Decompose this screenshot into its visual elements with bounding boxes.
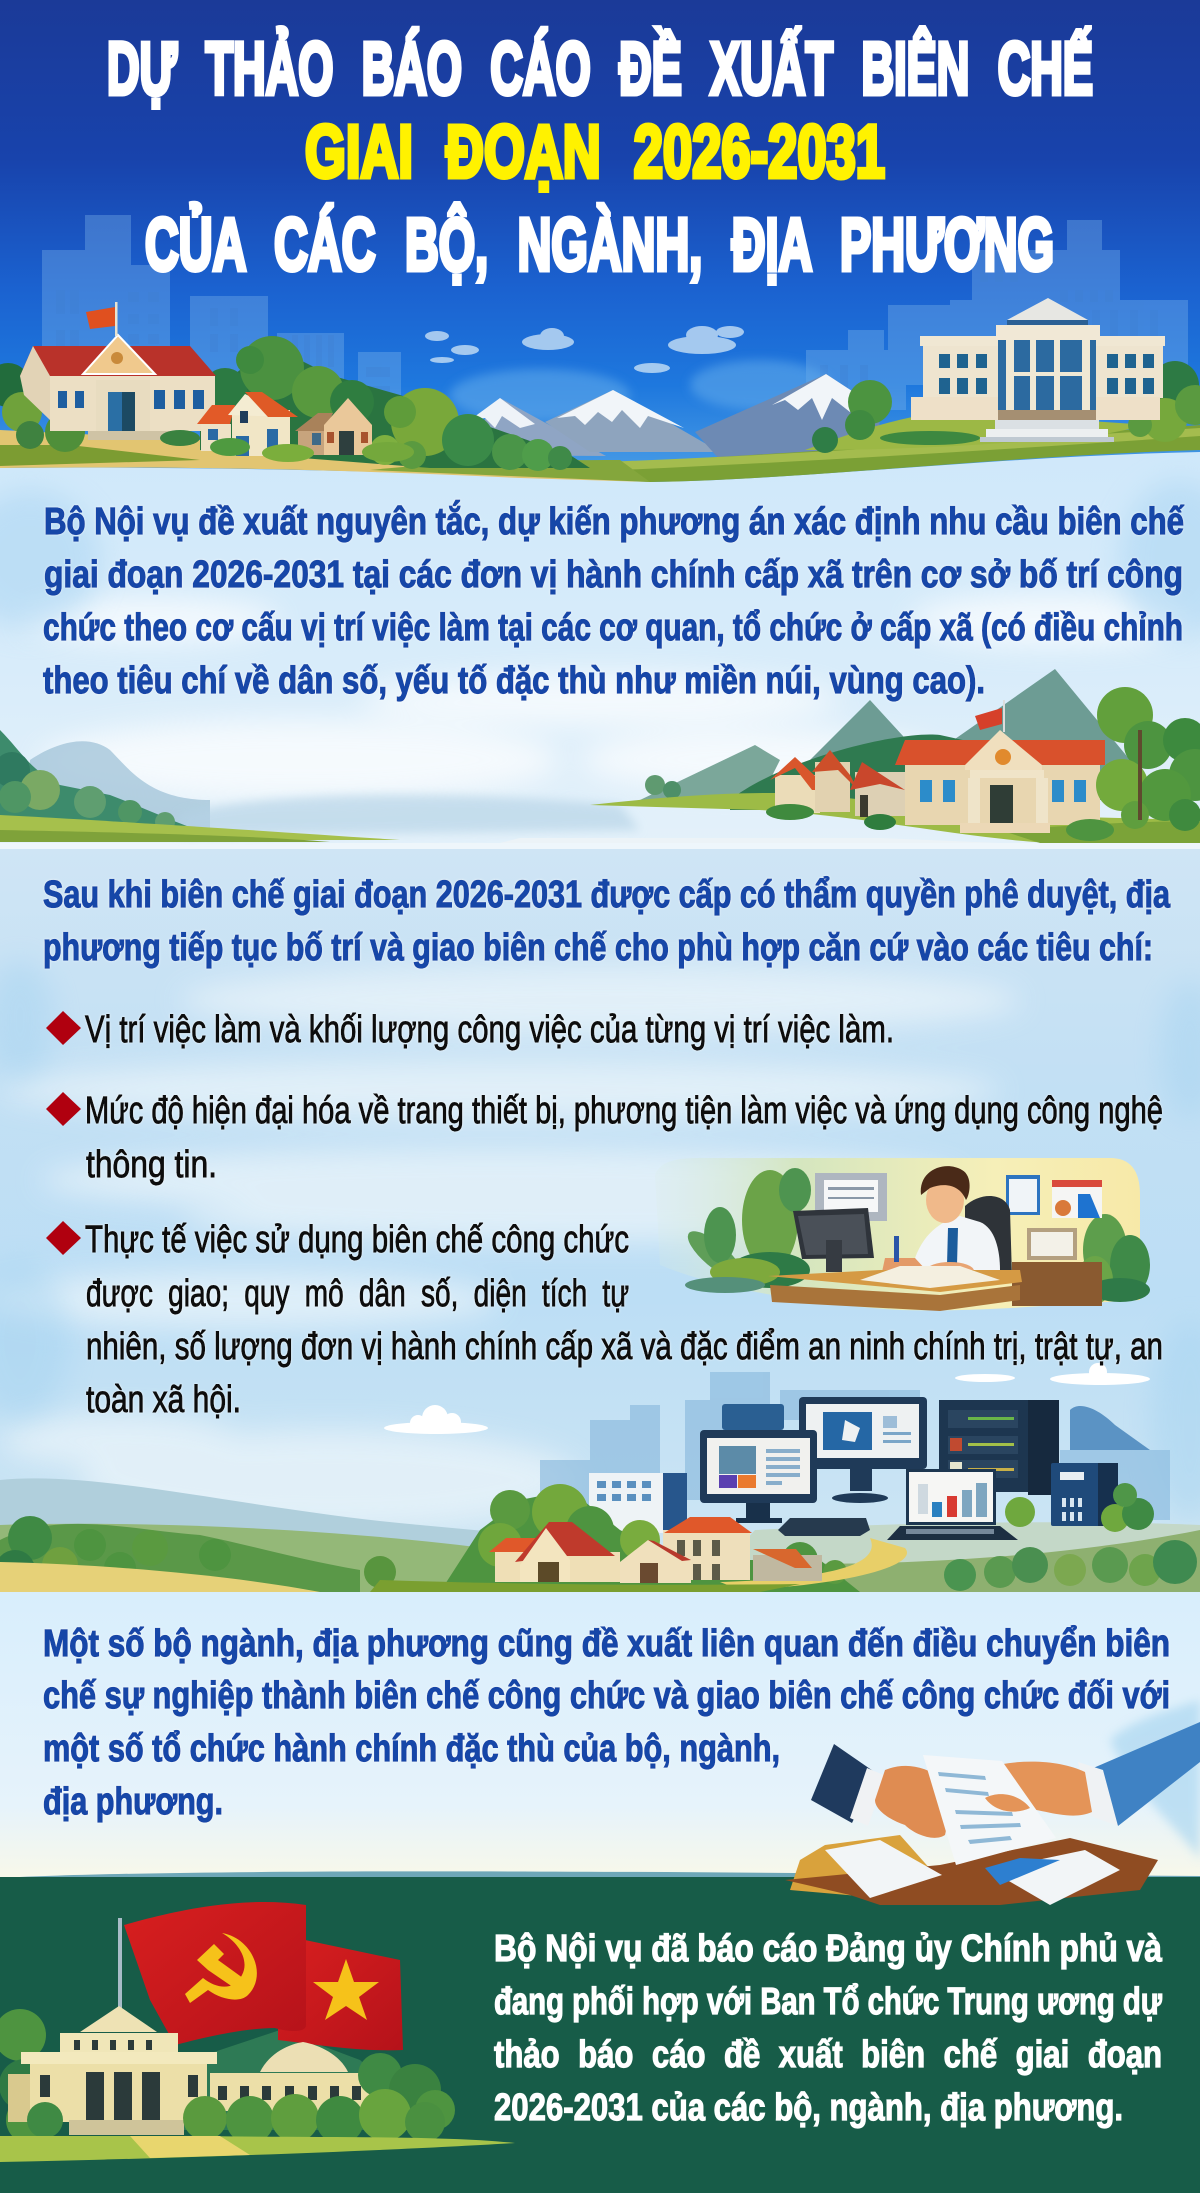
text block: section 1 paragraph: theo tiêu chí về dân số, yếu tố đặc thù như miền núi, vùng cao). <box>43 660 985 702</box>
icon: red flag with star <box>278 1940 403 2050</box>
icon: flag <box>975 700 1005 732</box>
illustration: platform <box>700 1522 1200 1590</box>
illustration: school and houses <box>766 700 1105 833</box>
illustration: white building <box>589 1473 687 1533</box>
panel: section 1 background <box>0 440 1200 850</box>
illustration: left trees <box>0 2009 54 2144</box>
illustration: folders and papers <box>785 1835 1158 1905</box>
illustration: server tower <box>939 1400 1059 1495</box>
illustration: handed paper <box>923 1755 1056 1865</box>
text block: section 3 paragraph: địa phương. <box>43 1781 223 1823</box>
illustration: government building <box>911 298 1165 442</box>
illustration: field <box>0 411 1200 482</box>
illustration: desk <box>768 1266 1022 1311</box>
icon: flagpole <box>118 1918 122 2008</box>
list item: criterion 2 <box>46 1090 1163 1186</box>
illustration: cabinet <box>1012 1262 1102 1306</box>
list item: criterion 3: Thực tế việc sử dụng biên chế công chức <box>85 1219 629 1261</box>
illustration: officer at desk <box>655 1158 1150 1311</box>
text block: section 1 paragraph <box>43 499 1185 702</box>
icon: red diamond <box>46 1092 81 1126</box>
illustration: sleeves <box>811 1722 1200 1826</box>
illustration: laptop <box>887 1469 1018 1540</box>
icon: red diamond <box>46 1221 81 1255</box>
illustration: background city <box>42 215 1188 423</box>
illustration: capitol building <box>8 2006 375 2135</box>
illustration: bushes <box>1005 1483 1154 1532</box>
illustration: left hills and trees <box>0 730 1000 843</box>
illustration: roads and ground <box>0 1538 907 1592</box>
illustration: small houses <box>160 392 414 462</box>
illustration: monitor <box>793 1208 874 1280</box>
illustration: ground right <box>590 793 1200 843</box>
illustration: plants left <box>681 1168 811 1293</box>
panel: header <box>0 0 1200 482</box>
panel: section 3 background <box>0 1592 1200 1878</box>
illustration: computers and village <box>0 1372 1200 1592</box>
text block: section 3 paragraph: một số tổ chức hành chính đặc thù của bộ, ngành, <box>43 1728 780 1770</box>
illustration: section 1 landscape <box>0 669 1200 843</box>
illustration: village houses <box>489 1517 822 1583</box>
icon: flag <box>86 302 118 336</box>
illustration: wall documents <box>815 1173 1102 1260</box>
illustration: front bushes <box>27 2053 455 2144</box>
icon: red flag with hammer and sickle <box>124 1902 306 2045</box>
illustration: small clouds <box>425 326 744 373</box>
illustration: school building <box>20 302 216 440</box>
illustration: man <box>882 1166 1000 1280</box>
illustration: back hill <box>160 2030 440 2130</box>
illustration: lawn <box>0 2136 515 2162</box>
illustration: mountains <box>460 374 880 460</box>
illustration: far city <box>540 1372 1170 1520</box>
text block: section 4 paragraph <box>494 1928 1163 2129</box>
illustration: trees <box>0 336 1200 471</box>
list item: criterion 3 <box>46 1219 1163 1421</box>
list item: criterion 2: thông tin. <box>86 1144 217 1186</box>
list item: criterion 3: toàn xã hội. <box>86 1379 241 1421</box>
panel: section 4 background <box>0 1877 1200 2193</box>
panel: section 2 background <box>0 843 1200 1593</box>
text block: section 2 intro <box>43 874 1171 969</box>
illustration: hands <box>875 1762 1092 1838</box>
illustration: right trees <box>864 687 1200 841</box>
illustration: handshake with documents <box>785 1722 1200 1905</box>
illustration: small tower <box>1051 1463 1118 1526</box>
illustration: front monitor <box>700 1430 817 1523</box>
illustration: mountains right <box>640 669 1130 810</box>
illustration: far hills <box>0 1478 800 1560</box>
list item: criterion 3: được giao; quy mô dân số, diện tích tự <box>86 1273 629 1315</box>
title <box>107 27 1093 286</box>
illustration: trees behind houses <box>0 1484 1197 1592</box>
illustration: back monitor <box>722 1397 927 1503</box>
list item: criterion 1: Vị trí việc làm và khối lượng công việc của từng vị trí việc làm. <box>85 1009 894 1051</box>
illustration: plants right <box>1077 1214 1150 1304</box>
illustration: chair <box>965 1196 1012 1277</box>
text block: section 3 paragraph <box>43 1623 1170 1823</box>
icon: red diamond <box>46 1011 81 1045</box>
title: GIAI ĐOẠN 2026-2031 <box>305 110 885 193</box>
illustration: party flag and building <box>0 1902 515 2162</box>
illustration: keyboard <box>778 1518 870 1536</box>
